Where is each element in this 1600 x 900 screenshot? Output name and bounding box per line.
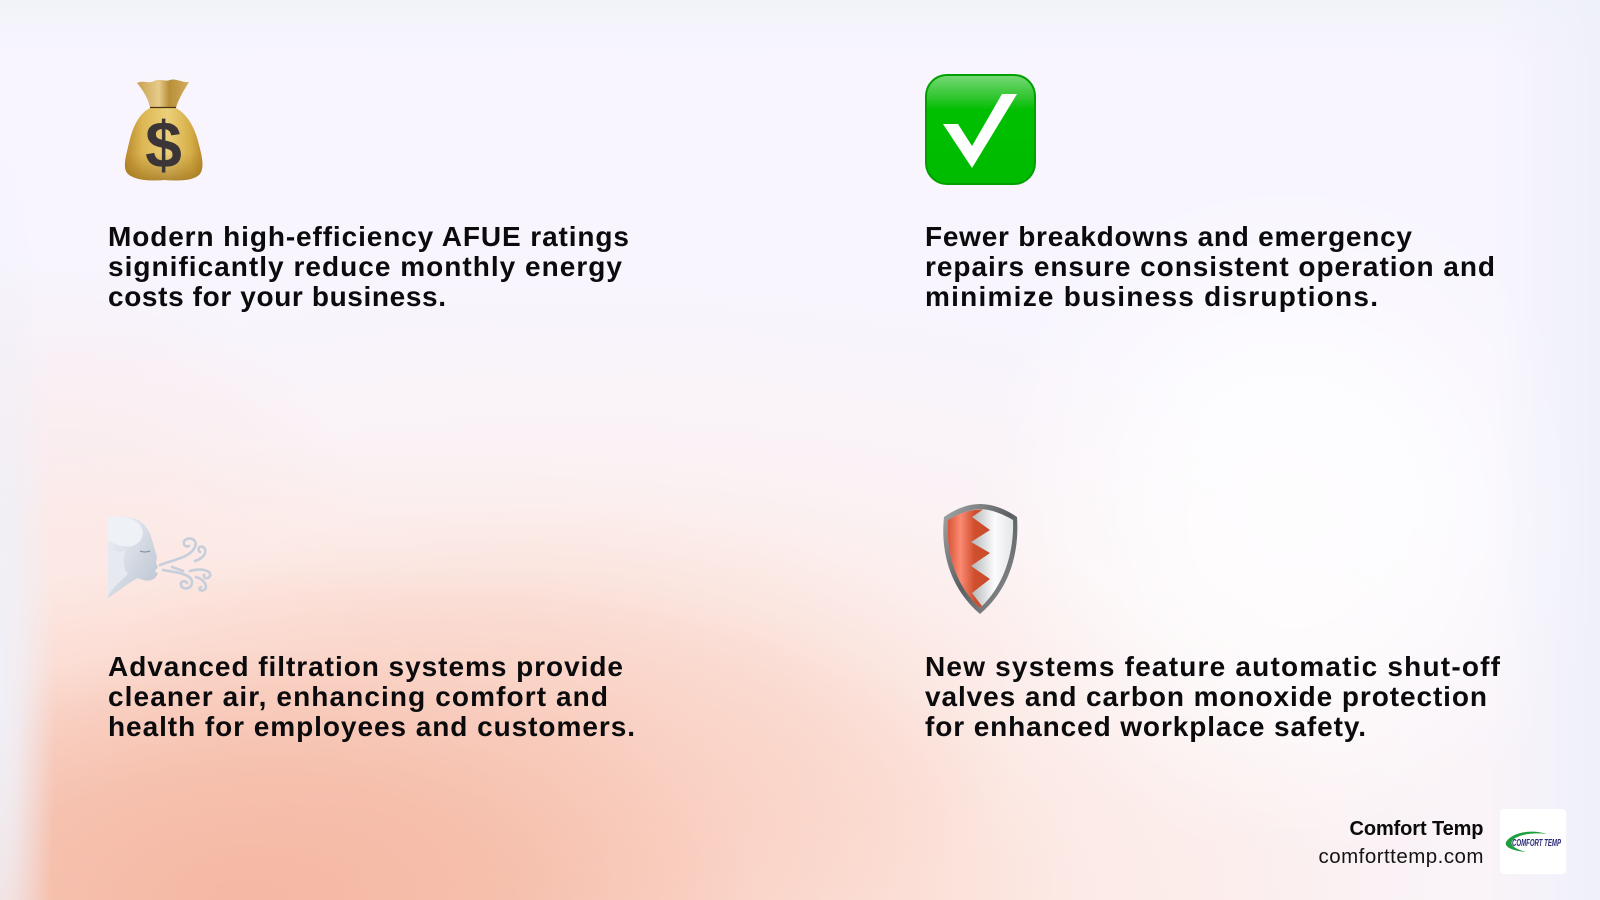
text: air quality benefit: cleaner air, enhancing comfort and [108,681,608,712]
brand name and website: Comfort Temp [1350,818,1484,840]
icon: check mark [925,74,1036,185]
text: safety benefit: for enhanced workplace safety. [925,711,1366,742]
logo badge: COMFORT TEMP [1512,838,1561,849]
text: energy savings benefit: significantly reduce monthly energy [108,251,622,282]
text: air quality benefit: Advanced filtration systems provide [108,651,623,682]
text: reliability benefit [925,221,1495,312]
text: reliability benefit: Fewer breakdowns and emergency [925,221,1412,252]
icon: money bag: $ [145,108,182,182]
icon: money bag [125,80,202,182]
text: air quality benefit: health for employees and customers. [108,711,635,742]
text: safety benefit: New systems feature automatic shut-off [925,651,1501,682]
text: energy savings benefit: Modern high-efficiency AFUE ratings [108,221,629,252]
text: reliability benefit: repairs ensure consistent operation and [925,251,1495,282]
text: energy savings benefit: costs for your business. [108,281,446,312]
logo badge [1500,809,1566,874]
text: safety benefit: valves and carbon monoxide protection [925,681,1487,712]
text: reliability benefit: minimize business disruptions. [925,281,1378,312]
brand name and website: comforttemp.com [1318,845,1484,868]
icon: shield [943,504,1017,614]
icon: blowing wind face [108,516,210,598]
text: air quality benefit [108,651,635,742]
text: safety benefit [925,651,1501,742]
text: energy savings benefit [108,221,629,312]
brand name and website [1318,818,1484,868]
